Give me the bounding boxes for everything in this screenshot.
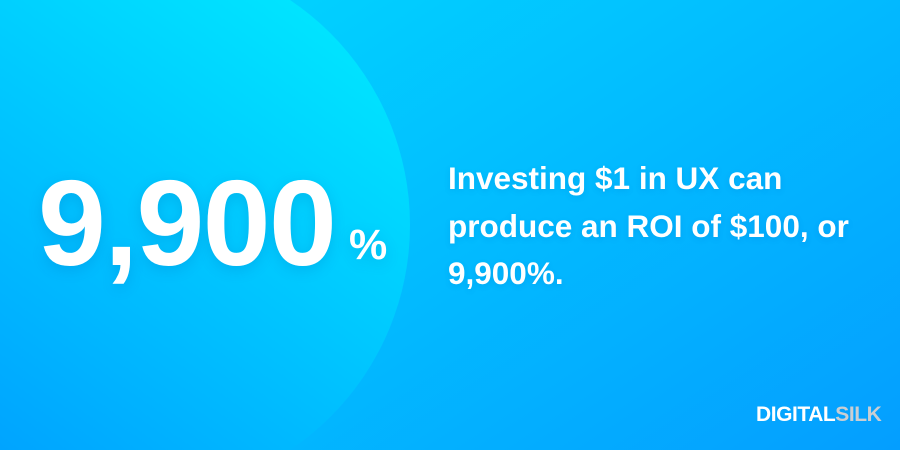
- description text: 9,900%.: [448, 255, 564, 291]
- number: 9,900: [38, 155, 335, 291]
- logo: Digital Silk: DIGITALSILK: [756, 403, 881, 426]
- description text: [448, 160, 849, 291]
- percent sign: %: [349, 221, 387, 269]
- description text: produce an ROI of $100, or: [448, 208, 849, 244]
- background circle: [0, 0, 410, 450]
- description text: Investing $1 in UX can: [448, 160, 782, 196]
- big statistic: [38, 155, 387, 291]
